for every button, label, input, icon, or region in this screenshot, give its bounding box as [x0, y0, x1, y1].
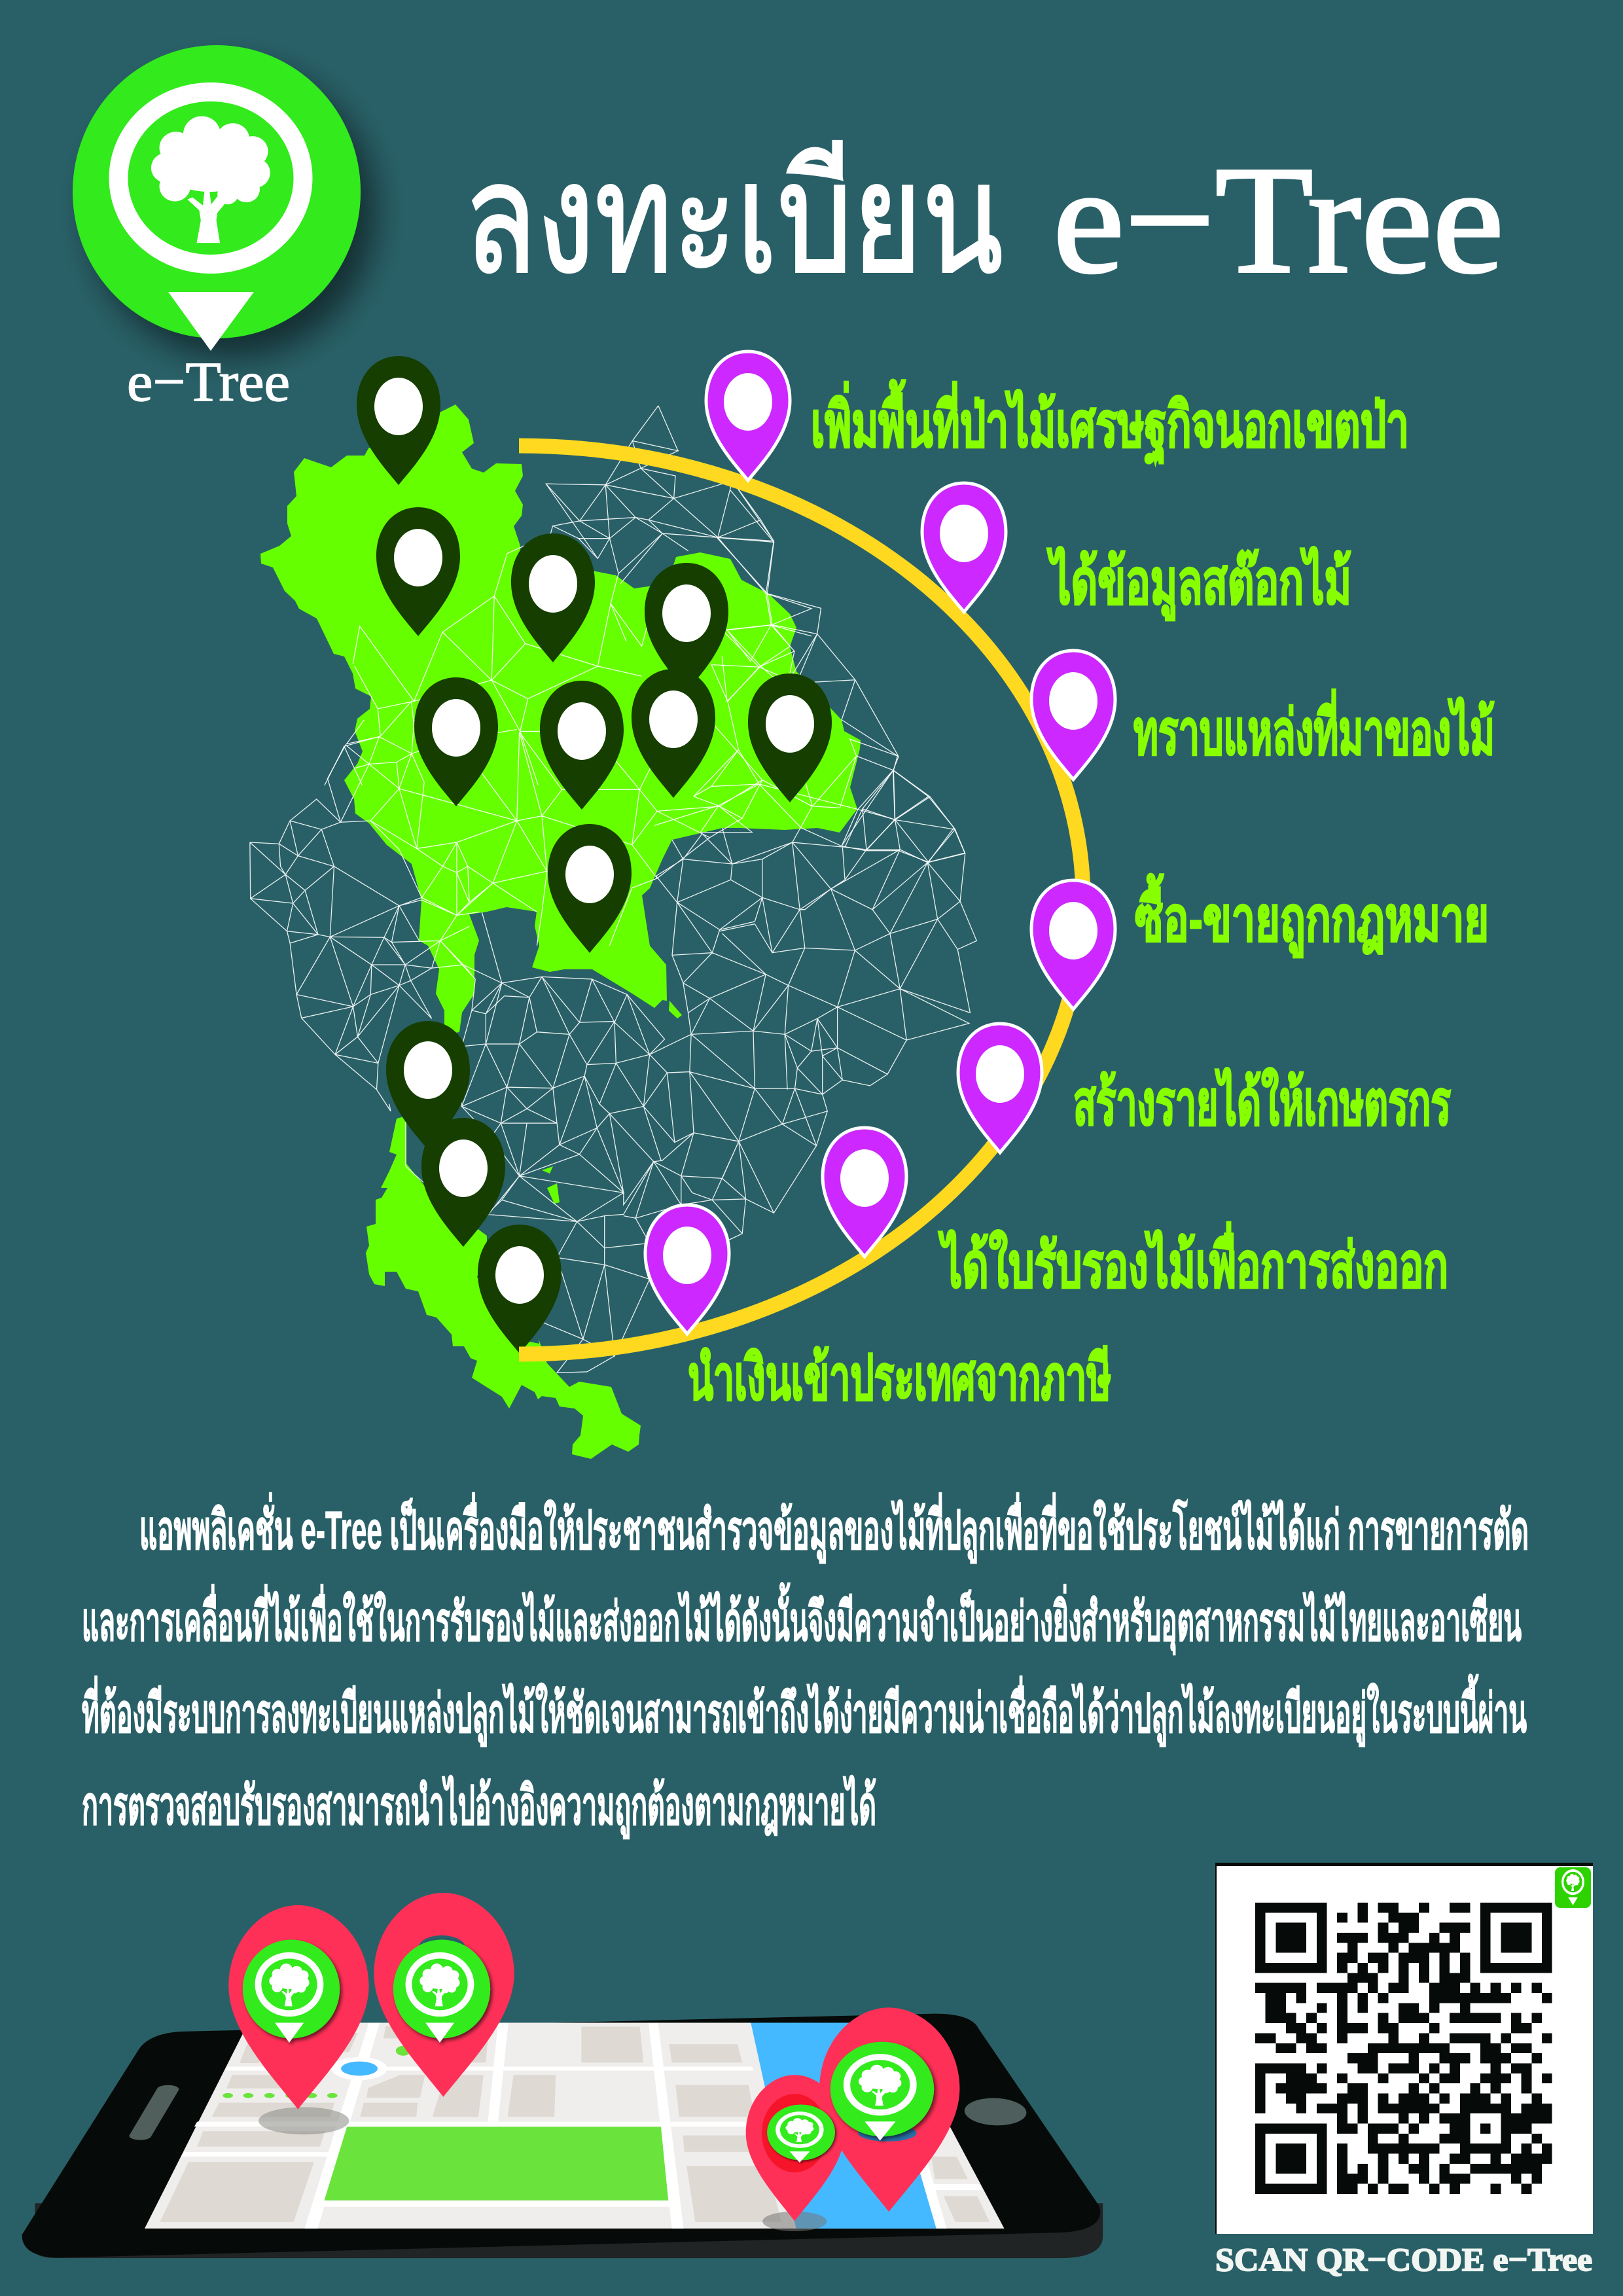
- smartphone with map: [22, 1893, 1103, 2258]
- mini app icon: [1555, 1867, 1591, 1908]
- benefit labels: ได้ข้อมูลสต๊อกไม้: [1046, 547, 1351, 621]
- dark green location pins on the map: [357, 356, 832, 1354]
- yellow arc: [519, 446, 1083, 1354]
- title: e−Tree: [1053, 135, 1504, 305]
- logo wordmark: e−Tree: [127, 350, 290, 413]
- description paragraph: การตรวจสอบรับรองสามารถนำไปอ้างอิงความถูกต้องตามกฎหมายได้: [82, 1775, 876, 1839]
- title: [464, 132, 1504, 305]
- QR caption: SCAN QR−CODE e−Tree: [1215, 2241, 1592, 2278]
- red map pin 2: [374, 1893, 514, 2097]
- red map pin 3: [819, 2007, 959, 2212]
- red map pin 4: [746, 2075, 844, 2221]
- mesh network overlay: [250, 406, 976, 1372]
- title: ลงทะเบียน: [464, 132, 1003, 304]
- description paragraph: [82, 1492, 1529, 1839]
- QR code card: [1215, 1863, 1593, 2234]
- benefit labels: นำเงินเข้าประเทศจากภาษี: [688, 1344, 1111, 1413]
- red map pin 1: [228, 1905, 369, 2109]
- tree logos in red pins: [243, 1940, 934, 2162]
- logo: e-Tree badge: [73, 45, 361, 413]
- QR modules: [1255, 1903, 1552, 2194]
- map of Thailand: [260, 404, 861, 1459]
- benefit labels: [688, 379, 1495, 1413]
- purple benefit pins: [645, 351, 1115, 1334]
